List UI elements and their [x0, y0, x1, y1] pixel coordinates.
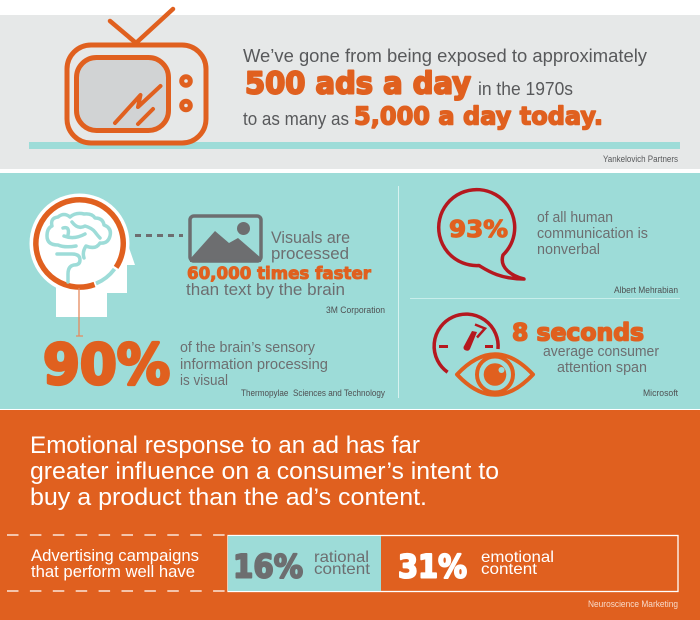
text: sensory processing [180, 339, 328, 389]
text: visuals processed: 60,000 times faster [187, 264, 372, 284]
heading: ad exposure: to as many as [243, 109, 349, 129]
panel: ad exposure [0, 9, 700, 169]
source: 3M Corporation: 3M Corporation [326, 305, 385, 315]
heading: ad exposure: in the 1970s [478, 79, 573, 99]
text: attention span: average consumer [543, 343, 659, 360]
text: visuals processed: than text by the brain [186, 280, 345, 299]
text: advertising campaigns: that perform well have [31, 562, 195, 581]
panel: visual statistics [0, 173, 700, 409]
icon: image [190, 216, 261, 262]
text: attention span: attention span [557, 359, 647, 376]
text: nonverbal: of all human [537, 209, 613, 226]
text: sensory processing: of the brain’s sensory [180, 339, 315, 356]
text: nonverbal: communication is [537, 225, 648, 242]
stat: 93%: 93% [449, 217, 508, 243]
heading: ad exposure: 5,000 a day today. [354, 102, 603, 130]
text: visuals processed [186, 228, 372, 299]
panel: emotional response [0, 410, 700, 620]
text: nonverbal: nonverbal [537, 241, 600, 258]
stat: 16% rational: 16% [233, 548, 303, 586]
heading: ad exposure: We’ve gone from being exposed to approximately [243, 45, 648, 66]
source: Albert Mehrabian: Albert Mehrabian [614, 285, 678, 295]
heading: emotional response: Emotional response to an ad has far [30, 432, 420, 459]
stat: 16% rational [233, 548, 371, 586]
stat: 31% emotional [398, 548, 554, 586]
icon: speech bubble [439, 190, 524, 279]
heading: ad exposure: 500 ads a day [245, 66, 471, 102]
stat: 31% emotional: emotional [481, 549, 554, 566]
text: sensory processing: information processing [180, 356, 328, 373]
icon: television [67, 9, 206, 143]
stat: 31% emotional: 31% [398, 548, 467, 586]
stat: 31% emotional: content [481, 561, 538, 578]
heading: emotional response: greater influence on a consumer’s intent to [30, 458, 499, 485]
connector: brain to 90% [76, 288, 83, 336]
icon: gauge [434, 314, 498, 372]
stat: 90%: 90% [43, 332, 170, 396]
source: Yankelovich Partners: Yankelovich Partners [603, 154, 678, 164]
text: visuals processed: processed [271, 244, 349, 263]
stat: 8 seconds: 8 seconds [512, 318, 644, 346]
icon: brain [47, 213, 110, 282]
decoration: dashed rules [7, 535, 228, 591]
icon: head with brain [30, 194, 135, 317]
icon: eye [457, 354, 533, 395]
heading: emotional response: buy a product than the ad’s content. [30, 484, 427, 511]
text: advertising campaigns [31, 546, 199, 581]
text: advertising campaigns: Advertising campaigns [31, 546, 199, 565]
source: Thermopylae: Thermopylae Sciences and Technology [241, 388, 385, 398]
text: sensory processing: is visual [180, 372, 228, 389]
source: Neuroscience Marketing: Neuroscience Marketing [588, 599, 678, 609]
heading: ad exposure [243, 45, 648, 130]
source: Microsoft: Microsoft [643, 388, 678, 398]
stat: 16% rational: rational [314, 549, 369, 566]
stat: 16% rational: content [314, 561, 371, 578]
comparison box [31, 536, 678, 592]
text: visuals processed: Visuals are [271, 228, 350, 247]
connector: dashed line [135, 234, 183, 237]
heading: emotional response [30, 432, 499, 511]
text: nonverbal [537, 209, 648, 258]
text: attention span [543, 343, 659, 376]
